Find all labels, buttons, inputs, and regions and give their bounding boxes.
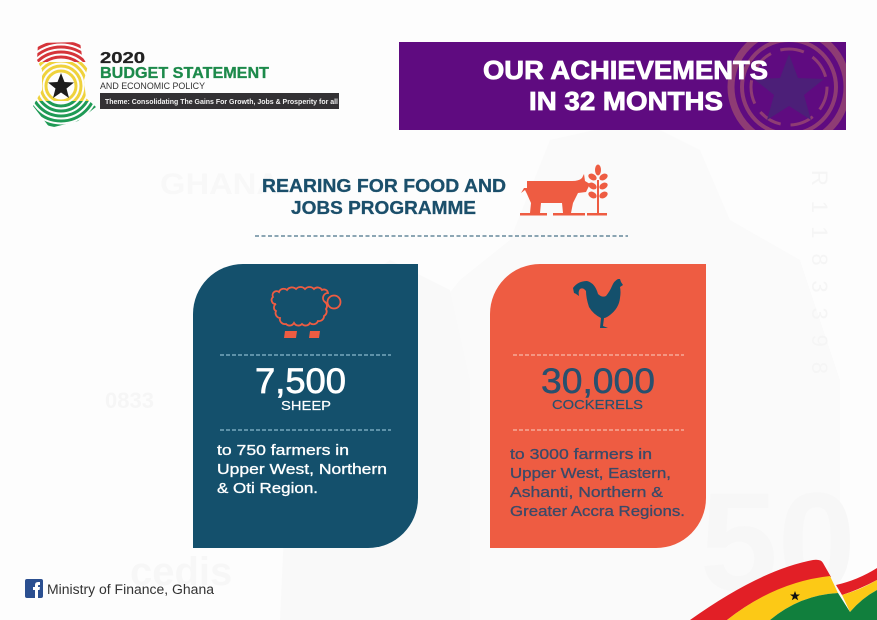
icon: sheep xyxy=(272,287,340,326)
text: cockerel recipients: Greater Accra Regions. xyxy=(510,504,685,520)
text: cockerel recipients: Upper West, Eastern, xyxy=(510,466,671,482)
background watermark banknote: cedis xyxy=(130,550,232,594)
text: cockerel recipients: Ashanti, Northern & xyxy=(510,485,663,501)
banner: our achievements xyxy=(399,42,846,130)
banner title xyxy=(483,55,768,116)
stat: 7,500 sheep: 7,500 xyxy=(255,362,346,401)
logo wordmark: BUDGET STATEMENT xyxy=(100,65,269,82)
stat: 7,500 sheep: SHEEP xyxy=(281,398,331,413)
banner emblem xyxy=(728,42,846,130)
footer: facebook credit xyxy=(25,579,215,598)
text: sheep recipients: to 750 farmers in xyxy=(217,443,349,459)
logo: Ghana map emblem xyxy=(33,42,96,127)
background watermark banknote: GHANA xyxy=(160,168,280,201)
icon: black star xyxy=(48,73,74,98)
logo wordmark: 2020 xyxy=(100,50,145,67)
icon: facebook xyxy=(25,579,43,598)
heading: rearing for food and jobs programme xyxy=(262,176,506,218)
sheep hooves xyxy=(284,331,320,338)
background watermark banknote: 0833 xyxy=(105,388,154,413)
stat: 30,000 cockerels: 30,000 xyxy=(541,362,655,401)
text: sheep recipients xyxy=(217,443,387,497)
logo wordmark: AND ECONOMIC POLICY xyxy=(100,81,205,91)
icon: cow and wheat xyxy=(520,164,609,216)
logo wordmark: Theme: Consolidating The Gains For Growth, Jobs & Prosperity for all xyxy=(105,97,338,106)
text: sheep recipients: Upper West, Northern xyxy=(217,462,387,478)
banner title: IN 32 MONTHS xyxy=(529,86,723,116)
text: cockerel recipients: to 3000 farmers in xyxy=(510,447,652,463)
icon: rooster xyxy=(573,279,623,328)
background watermark banknote: R1183398 xyxy=(807,170,832,380)
text: sheep recipients: & Oti Region. xyxy=(217,481,318,497)
panel: sheep xyxy=(193,264,418,548)
logo wordmark xyxy=(100,50,339,109)
panel: cockerels xyxy=(490,264,706,548)
heading: rearing for food and jobs programme: JOBS PROGRAMME xyxy=(291,198,476,218)
text: cockerel recipients xyxy=(510,447,685,520)
heading: rearing for food and jobs programme: REARING FOR FOOD AND xyxy=(262,176,506,196)
flag of Ghana xyxy=(690,560,877,620)
stat: 30,000 cockerels: COCKERELS xyxy=(552,397,643,412)
banner title: OUR ACHIEVEMENTS xyxy=(483,55,768,85)
icon: flag star xyxy=(790,591,800,600)
background watermark banknote: 50 xyxy=(700,463,856,620)
background watermark banknote xyxy=(105,120,856,620)
footer: facebook credit: Ministry of Finance, Ghana xyxy=(47,582,215,597)
